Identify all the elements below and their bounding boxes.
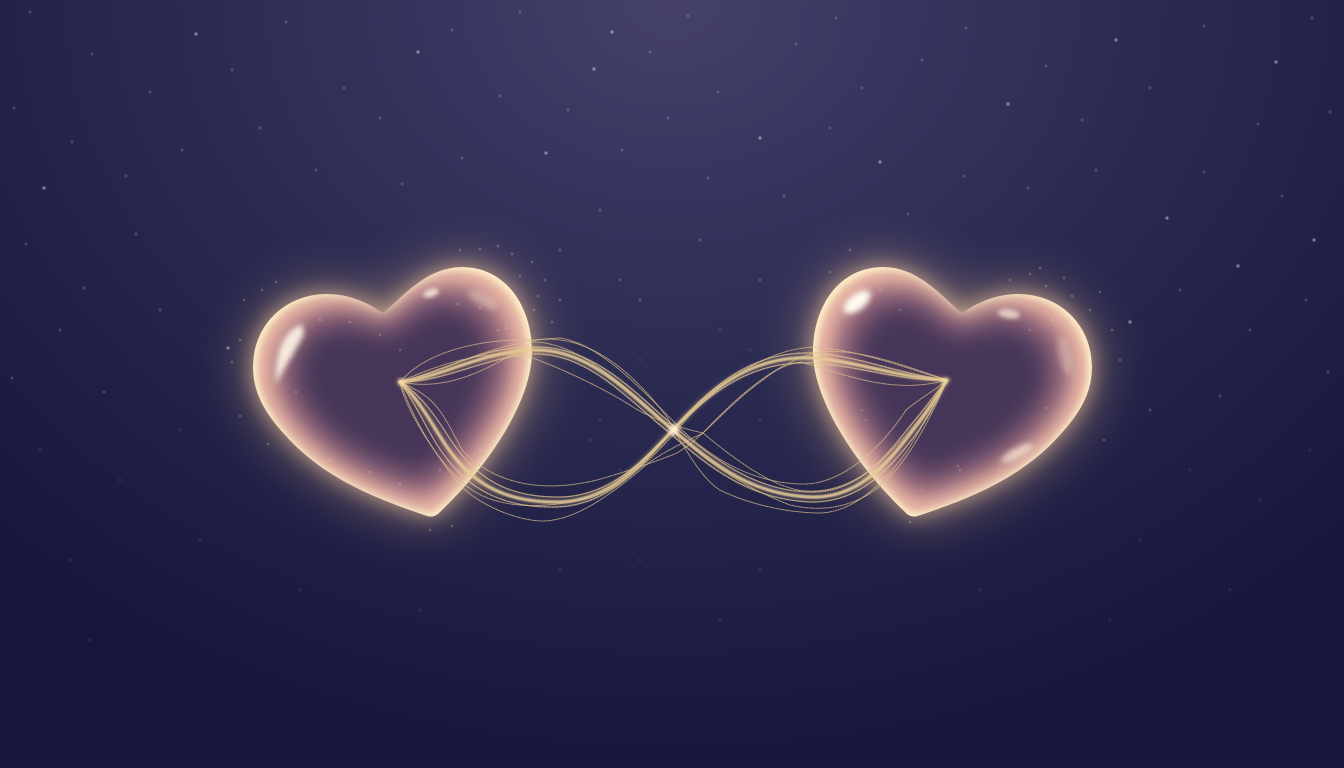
highlight: right heart lower sheen xyxy=(999,440,1035,466)
left anchor spark xyxy=(399,379,405,385)
threads: golden infinity strands xyxy=(399,338,947,521)
heart: left xyxy=(253,267,532,517)
heart: right xyxy=(813,267,1092,517)
specks: inside right heart xyxy=(862,290,1052,490)
crossing spark xyxy=(669,425,679,435)
highlight: right heart faint side sheen xyxy=(1055,335,1075,377)
thread outliers xyxy=(400,338,947,521)
highlight: left heart faint sheen xyxy=(466,287,500,313)
sparkle dust around hearts xyxy=(232,246,1120,530)
right anchor spark xyxy=(942,378,946,384)
highlight: right heart top-left glint xyxy=(839,286,875,318)
thread glow xyxy=(400,350,947,502)
highlight: right heart top glint xyxy=(997,308,1021,320)
highlight: left heart top glint xyxy=(422,287,440,299)
highlight: left heart side sheen xyxy=(276,324,304,384)
thread cores xyxy=(400,350,947,502)
specks: inside left heart xyxy=(290,304,506,484)
